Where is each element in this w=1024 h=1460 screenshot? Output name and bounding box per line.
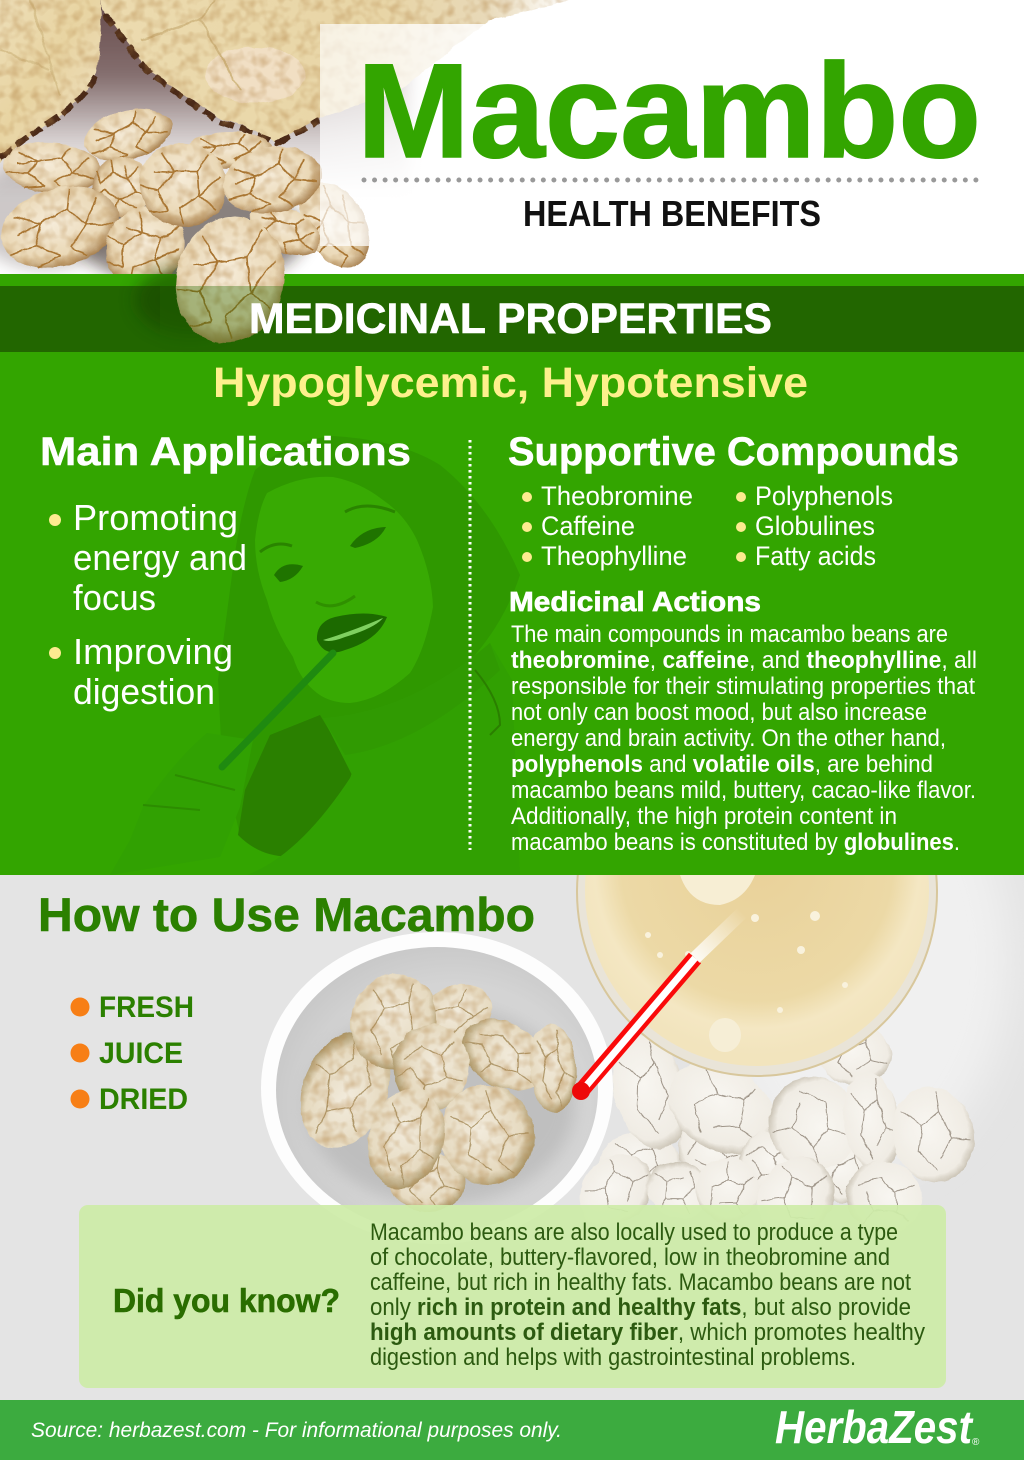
list: main applications: digestion	[73, 671, 215, 712]
list: supportive compounds: Caffeine	[541, 511, 635, 541]
dotted title divider	[364, 178, 978, 182]
footer	[0, 1400, 1024, 1460]
list: forms of use: FRESH	[99, 991, 194, 1024]
list: main applications: focus	[73, 577, 156, 618]
text: medicinal actions: macambo beans mild, buttery, cacao-like flavor.	[511, 777, 976, 804]
callout text: Macambo beans are also locally used to produce a type	[370, 1219, 898, 1246]
photo: macambo beans and split pods	[0, 0, 570, 304]
callout text: high amounts of dietary fiber, which promotes healthy	[370, 1319, 925, 1346]
list: supportive compounds: Theobromine	[541, 481, 693, 511]
text: medicinal actions	[511, 621, 977, 856]
list: forms of use	[70, 996, 192, 1109]
list: main applications: energy and	[73, 537, 247, 578]
callout text: digestion and helps with gastrointestinal problems.	[370, 1344, 856, 1371]
header band	[0, 286, 1024, 352]
list: forms of use: JUICE	[99, 1037, 183, 1070]
callout heading: Did you know?	[113, 1282, 340, 1319]
text: medicinal actions: theobromine, caffeine, and theophylline, all	[511, 647, 977, 674]
heading: medicinal actions: Medicinal Actions	[509, 586, 761, 617]
source note: Source: herbazest.com - For informational purposes only.	[31, 1419, 562, 1442]
heading: supportive compounds: Supportive Compounds	[508, 430, 959, 474]
list: main applications	[49, 497, 247, 712]
callout: did you know	[79, 1205, 946, 1388]
heading: medicinal properties: MEDICINAL PROPERTIES	[249, 295, 772, 343]
translucent white title panel	[320, 24, 580, 246]
list: supportive compounds	[522, 481, 893, 571]
callout text	[370, 1219, 925, 1371]
registered mark: ®	[972, 1437, 980, 1448]
list: forms of use: DRIED	[99, 1083, 188, 1116]
panel: medicinal properties	[0, 204, 1024, 875]
heading: main applications: Main Applications	[40, 430, 411, 474]
callout text: only rich in protein and healthy fats, but also provide	[370, 1294, 911, 1321]
woman photo tinted green	[143, 436, 520, 856]
list: main applications: Promoting	[73, 497, 238, 538]
callout text: caffeine, but rich in healthy fats. Macambo beans are not	[370, 1269, 911, 1296]
list: supportive compounds: Polyphenols	[755, 481, 893, 511]
text: medicinal actions: responsible for their stimulating properties that	[511, 673, 975, 700]
bean over band	[161, 204, 299, 356]
text: medicinal actions: not only can boost mood, but also increase	[511, 699, 927, 726]
green panel background	[0, 274, 1024, 875]
list: supportive compounds: Fatty acids	[755, 541, 876, 571]
straw	[572, 910, 745, 1100]
logo: HerbaZest: HerbaZest	[775, 1401, 973, 1453]
subheading: properties: Hypoglycemic, Hypotensive	[213, 359, 808, 407]
list: supportive compounds: Theophylline	[541, 541, 687, 571]
text: medicinal actions: The main compounds in macambo beans are	[511, 621, 948, 648]
bowl of beans	[261, 932, 613, 1212]
glass shadow	[752, 875, 1000, 1107]
photo: white beans	[580, 1030, 975, 1205]
subtitle: HEALTH BENEFITS	[523, 193, 821, 234]
vertical dotted divider	[468, 440, 472, 850]
glass of juice	[576, 875, 938, 1077]
title: Macambo	[357, 37, 981, 186]
text: medicinal actions: energy and brain activity. On the other hand,	[511, 725, 946, 752]
bean shadow on band	[135, 265, 245, 335]
callout text: of chocolate, buttery-flavored, low in theobromine and	[370, 1244, 890, 1271]
heading: how to use: How to Use Macambo	[38, 888, 535, 941]
list: supportive compounds: Globulines	[755, 511, 875, 541]
text: medicinal actions: macambo beans is constituted by globulines.	[511, 829, 960, 856]
text: medicinal actions: polyphenols and volatile oils, are behind	[511, 751, 933, 778]
list: main applications: Improving	[73, 631, 233, 672]
panel: how to use	[0, 875, 1024, 1400]
text: medicinal actions: Additionally, the high protein content in	[511, 803, 897, 830]
grey panel background	[0, 875, 1024, 1400]
